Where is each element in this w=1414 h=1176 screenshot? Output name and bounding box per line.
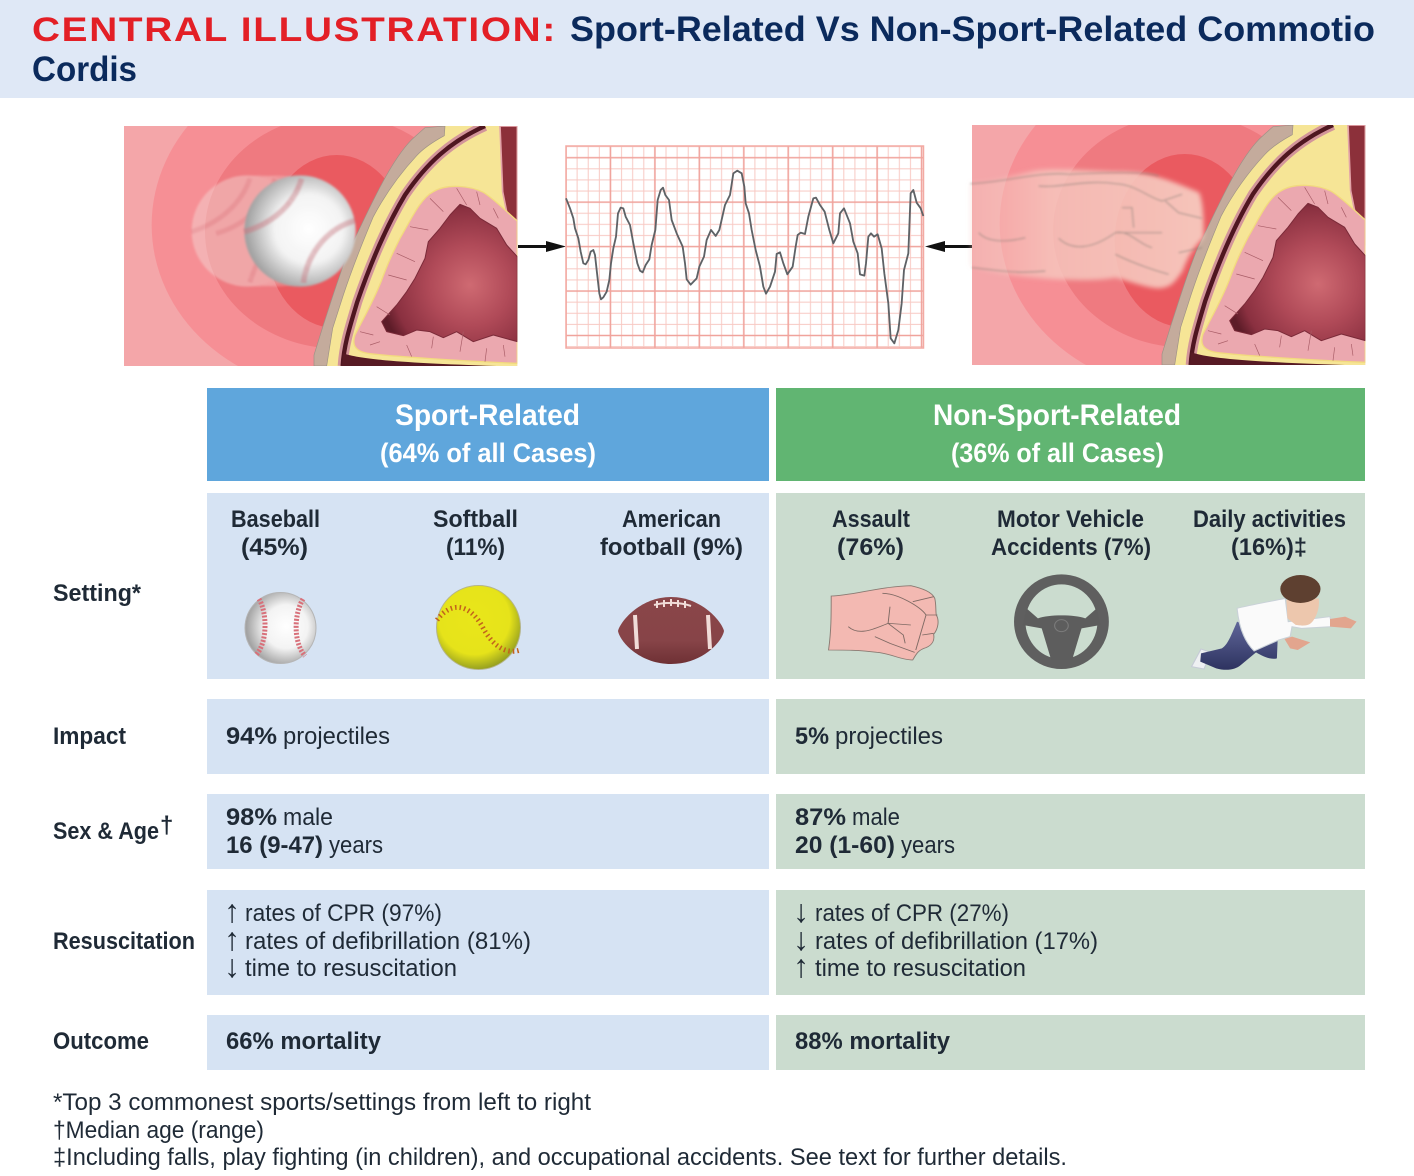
header: sport-related: Sport-Related [395, 399, 580, 432]
cell: sport resuscitation: rates of CPR (97%) [245, 900, 442, 927]
cell: non-sport impact [776, 699, 1365, 774]
label: daily activities: (16%)‡ [1231, 534, 1307, 561]
label: softball: Softball [433, 506, 518, 533]
icon: american football [618, 597, 724, 664]
icon: softball [436, 586, 520, 670]
label: motor vehicle accidents: Accidents (7%) [991, 534, 1151, 561]
cell: sport resuscitation: ↑ [224, 921, 240, 957]
illustration: baseball impact on chest [124, 58, 522, 392]
illustration: fist impact on chest [970, 57, 1370, 391]
header: non-sport-related: (36% of all Cases) [951, 438, 1164, 468]
header: sport-related [207, 388, 769, 481]
cell: sport resuscitation: ↓ [224, 948, 240, 984]
cell: sport outcome [207, 1015, 769, 1070]
footnotes [53, 1089, 1067, 1171]
cell: non-sport outcome: 88% mortality [795, 1028, 951, 1055]
panel: sport settings [207, 493, 769, 679]
cell: non-sport sex and age: 87% [795, 804, 846, 831]
cell: sport impact: projectiles [283, 723, 390, 750]
cell: sport sex and age: 98% [226, 804, 277, 831]
cell: non-sport resuscitation: ↑ [793, 948, 809, 984]
label: assault: (76%) [837, 534, 904, 561]
footnotes: *Top 3 commonest sports/settings from left to right [53, 1089, 591, 1116]
cell: sport resuscitation: rates of defibrillation (81%) [245, 928, 531, 955]
icon: crawling child [1192, 575, 1357, 670]
icon: steering wheel [1020, 579, 1103, 664]
cell: non-sport resuscitation: time to resuscitation [815, 955, 1026, 982]
cell: non-sport impact: 5% [795, 723, 829, 750]
cell: sport sex and age: years [329, 832, 383, 859]
arrow: sport impact to ECG [518, 241, 566, 252]
cell: non-sport impact: projectiles [835, 723, 943, 750]
cell: sport resuscitation: time to resuscitation [245, 955, 457, 982]
row label: setting: Setting* [53, 580, 142, 607]
cell: non-sport sex and age: years [901, 832, 955, 859]
row label: sex and age: Sex & Age [53, 818, 159, 845]
label: baseball: (45%) [241, 534, 308, 561]
row label: sex and age: † [160, 812, 173, 839]
footnotes: ‡Including falls, play fighting (in children), and occupational accidents. See text for further details. [53, 1144, 1067, 1171]
icon: fist [829, 586, 938, 660]
cell: non-sport sex and age: male [852, 804, 900, 831]
label: baseball: Baseball [231, 506, 320, 533]
header: sport-related: (64% of all Cases) [380, 438, 596, 468]
cell: sport sex and age: male [283, 804, 333, 831]
cell: non-sport resuscitation: rates of CPR (27%) [815, 900, 1009, 927]
cell: sport sex and age [207, 794, 769, 869]
cell: sport impact [207, 699, 769, 774]
label: daily activities: Daily activities [1193, 506, 1346, 533]
cell: non-sport sex and age [776, 794, 1365, 869]
title text line 2: Cordis [32, 50, 137, 89]
row label: outcome: Outcome [53, 1028, 149, 1055]
cell: non-sport resuscitation: rates of defibrillation (17%) [815, 928, 1098, 955]
ECG chart: ventricular fibrillation trace [566, 146, 924, 348]
header: non-sport-related: Non-Sport-Related [933, 399, 1181, 432]
label: softball: (11%) [446, 534, 505, 561]
cell: non-sport outcome [776, 1015, 1365, 1070]
cell: sport resuscitation [207, 890, 769, 995]
row label: resuscitation: Resuscitation [53, 928, 195, 955]
cell: sport resuscitation: ↑ [224, 893, 240, 929]
row label: impact: Impact [53, 723, 126, 750]
title banner [0, 0, 1414, 98]
icon: baseball [245, 592, 316, 664]
arrow: non-sport impact to ECG [925, 241, 972, 252]
header: non-sport-related [776, 388, 1365, 481]
label: american football: football (9%) [600, 534, 743, 561]
cell: non-sport resuscitation: ↓ [793, 893, 809, 929]
title text line 1: Sport-Related Vs Non-Sport-Related Commotio [570, 10, 1375, 49]
cell: sport sex and age: 16 (9-47) [226, 832, 323, 859]
cell: sport impact: 94% [226, 723, 277, 750]
label: motor vehicle accidents: Motor Vehicle [997, 506, 1144, 533]
cell: non-sport resuscitation [776, 890, 1365, 995]
cell: non-sport sex and age: 20 (1-60) [795, 832, 895, 859]
cell: non-sport resuscitation: ↓ [793, 921, 809, 957]
label: american football: American [622, 506, 721, 533]
label: assault: Assault [832, 506, 910, 533]
title label: CENTRAL ILLUSTRATION: [32, 10, 555, 48]
cell: sport outcome: 66% mortality [226, 1028, 382, 1055]
footnotes: †Median age (range) [53, 1117, 264, 1144]
panel: non-sport settings [776, 493, 1365, 679]
